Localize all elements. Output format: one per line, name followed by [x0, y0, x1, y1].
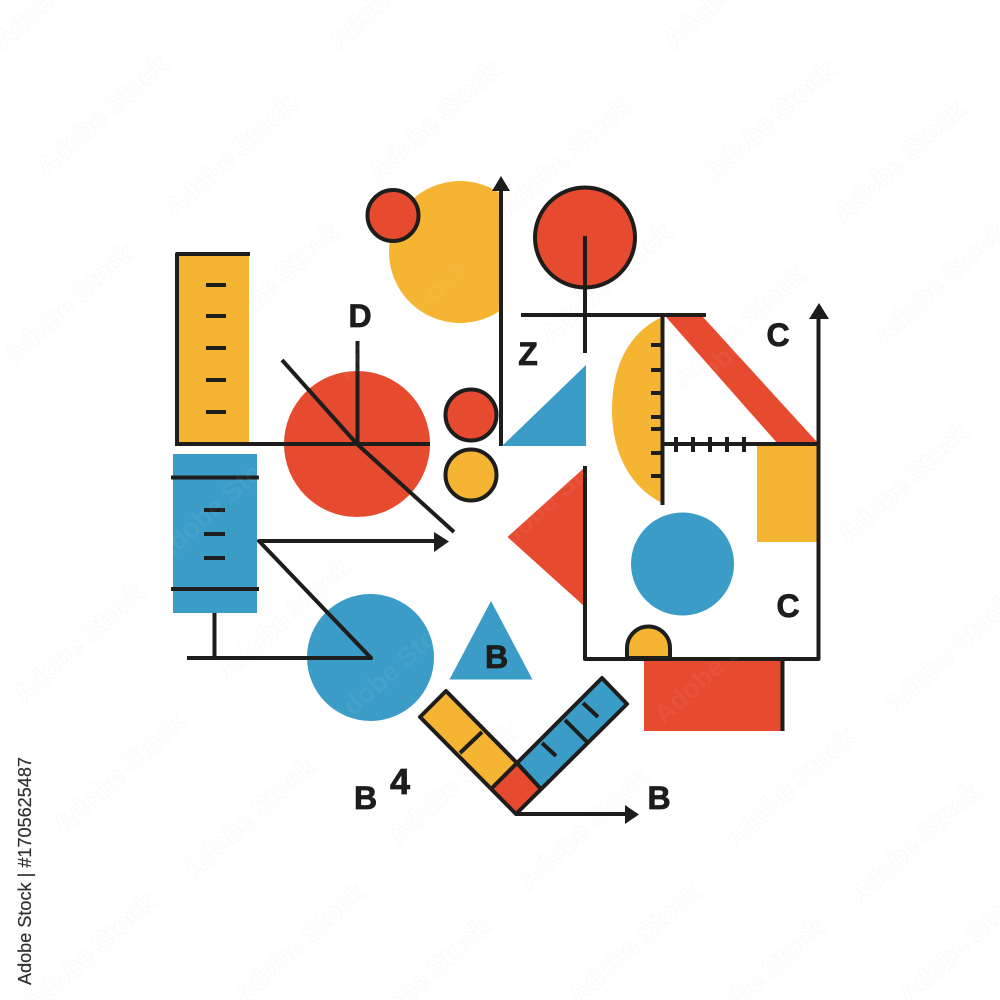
- label C, upper: C: [766, 317, 790, 353]
- watermark pattern: Adobe Stock: [513, 761, 656, 895]
- watermark overlay on shapes: Adobe Stock: [331, 253, 474, 387]
- blue ruler with stem: [171, 454, 259, 658]
- label 4: 4: [390, 761, 410, 802]
- red parallelogram: [666, 317, 817, 444]
- red rectangle: [644, 659, 782, 731]
- watermark pattern: Adobe Stock: [0, 236, 141, 370]
- horizontal ruler line: [662, 437, 818, 452]
- watermark pattern: Adobe Stock: [363, 54, 506, 188]
- watermark pattern: Adobe Stock: [31, 48, 174, 182]
- watermark pattern: Adobe Stock: [159, 89, 302, 223]
- watermark pattern: Adobe Stock: [828, 94, 971, 228]
- yellow rectangle: [757, 444, 817, 542]
- label B, bottom left: B: [354, 780, 377, 816]
- red circle with axes: [175, 341, 454, 532]
- large red circle with cross line: [521, 188, 706, 353]
- frame with right arrow: [585, 303, 829, 659]
- watermark pattern: Adobe Stock: [833, 416, 976, 550]
- yellow circle, middle: [446, 450, 496, 500]
- watermark overlay on shapes: Adobe Stock: [148, 436, 291, 570]
- watermark pattern: Adobe Stock: [535, 216, 678, 350]
- watermark pattern: Adobe Stock: [718, 721, 861, 855]
- red circle, middle: [446, 390, 496, 440]
- watermark overlay on shapes: [148, 253, 811, 735]
- watermark overlay on shapes: Adobe Stock: [481, 431, 624, 565]
- yellow ruler: [177, 254, 250, 444]
- blue circle, lower left: [307, 594, 434, 721]
- label Z: Z: [518, 336, 538, 372]
- large yellow circle with vertical arrow: [389, 176, 510, 446]
- zigzag arrow: [187, 532, 449, 658]
- blue triangle with B: [450, 601, 532, 680]
- watermark pattern: Adobe Stock: [48, 706, 191, 840]
- watermark pattern: Adobe Stock: [178, 751, 321, 885]
- watermark overlay on shapes: Adobe Stock: [648, 596, 791, 730]
- watermark pattern: Adobe Stock: [493, 91, 636, 225]
- small red circle, top: [368, 190, 418, 241]
- watermark pattern: Adobe Stock: [383, 716, 526, 850]
- watermark pattern: Adobe Stock: [202, 216, 345, 350]
- bottom arrow: [516, 805, 639, 824]
- label D: D: [348, 298, 372, 334]
- watermark overlay on shapes: Adobe Stock: [323, 601, 466, 735]
- yellow half circle: [627, 626, 670, 658]
- blue triangle with B: B: [485, 639, 508, 675]
- side credit text: Adobe Stock | #1705625487: [15, 757, 35, 985]
- label B, bottom right: B: [647, 780, 671, 816]
- blue right triangle: [502, 365, 586, 446]
- watermark pattern: Adobe Stock: [668, 259, 811, 393]
- red triangle: [508, 468, 584, 606]
- blue circle in frame: [631, 512, 734, 616]
- watermark overlay on shapes: Adobe Stock: [668, 276, 811, 410]
- watermark pattern: Adobe Stock: [213, 551, 356, 685]
- watermark pattern: Adobe Stock: [843, 776, 986, 910]
- V-shaped ruler: [420, 678, 627, 814]
- watermark pattern: Adobe Stock: [8, 576, 151, 710]
- yellow half ellipse with ticks: [612, 315, 662, 505]
- label C, lower: C: [776, 588, 800, 624]
- watermark pattern: Adobe Stock: [698, 54, 841, 188]
